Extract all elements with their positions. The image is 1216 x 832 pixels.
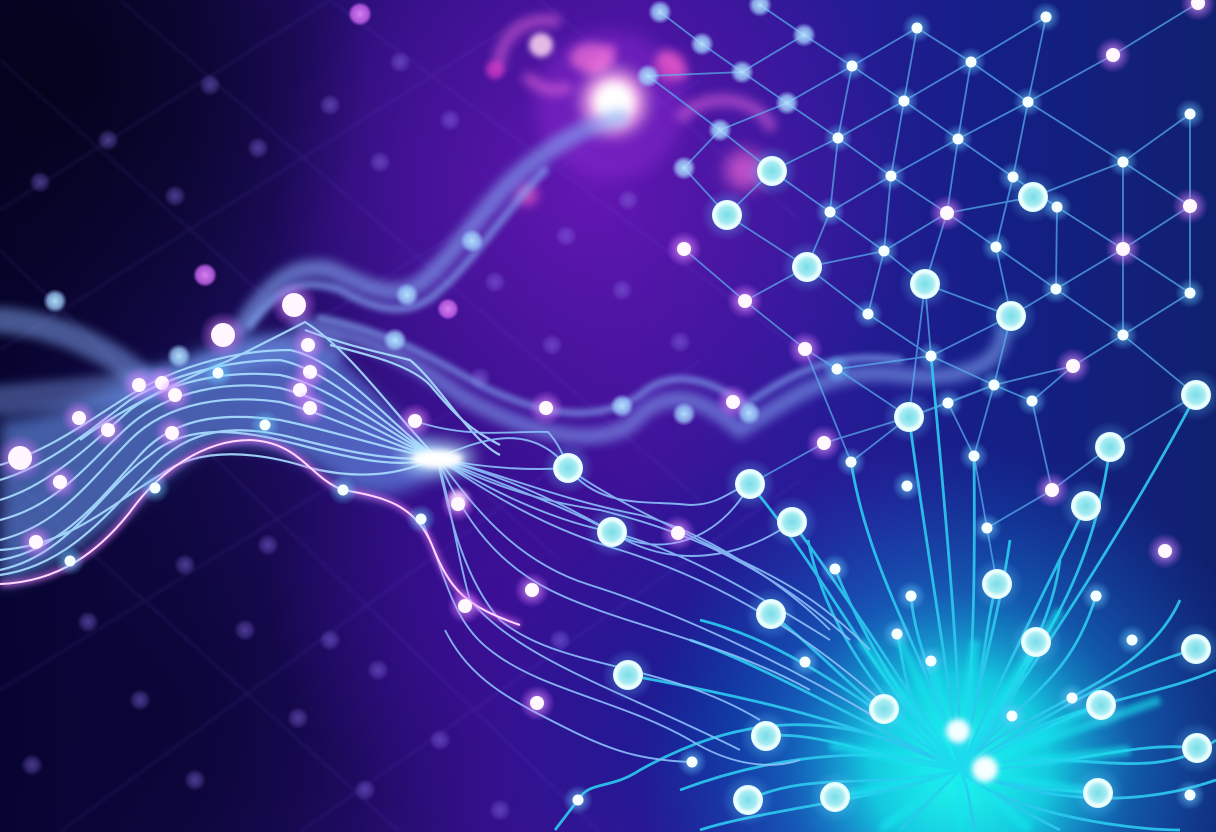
glow: soft wave ribbons — [0, 118, 1003, 436]
nodes: left and centre — [0, 2, 761, 721]
burst thick core fibres — [830, 610, 1160, 830]
glow: haze behind fibre bundle — [0, 337, 450, 584]
radial cyan fibres — [555, 356, 1216, 830]
nodes: mesh small — [563, 0, 1216, 815]
mesh network lines — [648, 3, 1198, 584]
wave fibre bundle centre — [415, 421, 880, 765]
background lattice — [0, 0, 800, 832]
centre convergence glow — [401, 442, 473, 509]
bright pink wave line — [0, 440, 520, 625]
nodes: large glass spheres — [542, 145, 1216, 826]
glow: cyan burst — [540, 400, 1216, 832]
wave fibre bundle left — [0, 322, 500, 575]
glow: pink nebula — [486, 20, 772, 206]
burst core nodes — [946, 719, 998, 782]
